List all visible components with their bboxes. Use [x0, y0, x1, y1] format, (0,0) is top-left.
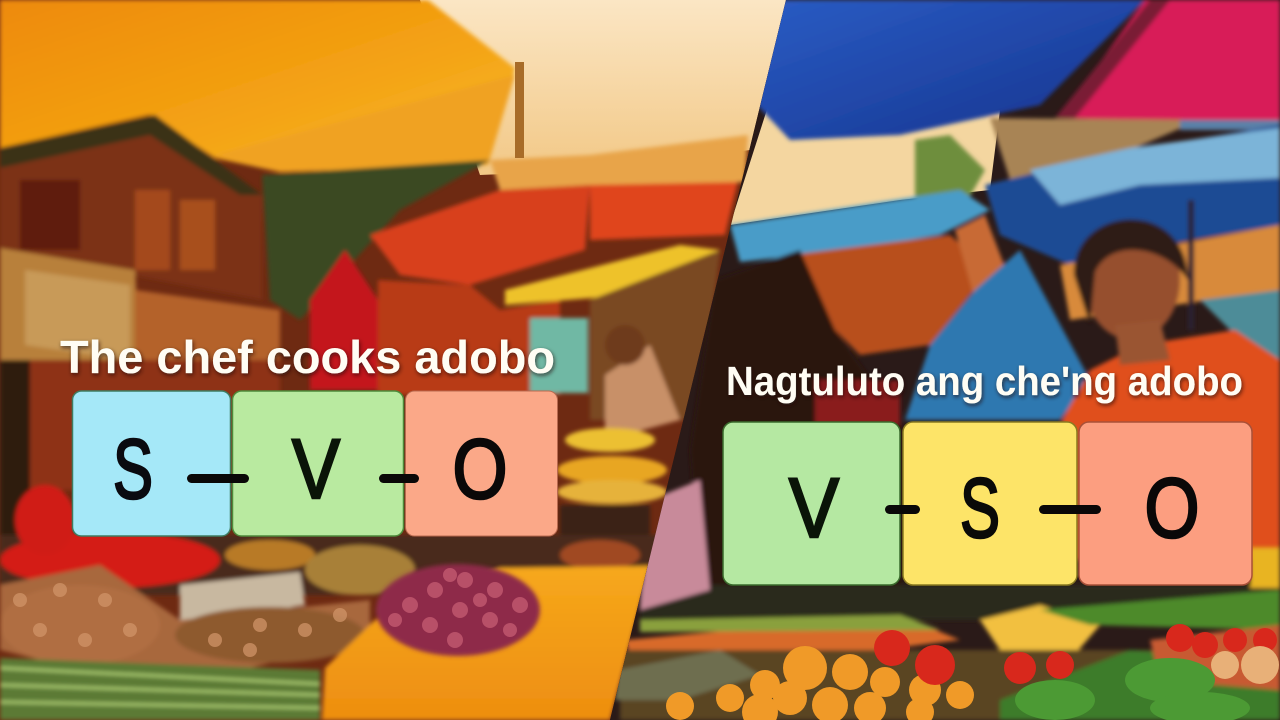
sky: [420, 0, 790, 175]
green onions: [0, 658, 320, 720]
block: object: O: [1144, 461, 1200, 555]
panel: English sentence and SVO blocks: [60, 331, 558, 536]
panel: right market scene (Filipino): [600, 0, 1280, 720]
panel: left market scene (English): [0, 0, 790, 720]
food trays: [565, 428, 655, 452]
orange awning: [0, 0, 515, 172]
block: verb: [232, 391, 404, 536]
vendor: [1062, 219, 1280, 560]
block: subject: S: [960, 461, 1000, 555]
block: verb: V: [789, 461, 839, 555]
vegetables: [626, 626, 961, 654]
orange tarp: [790, 235, 990, 355]
red peppers: [874, 624, 1277, 685]
block: object: O: [452, 422, 508, 516]
oranges: [666, 646, 974, 720]
panel: Filipino sentence and VSO blocks: [723, 358, 1252, 585]
connector: verb to object: [379, 474, 419, 483]
brown produce mound: [0, 565, 370, 680]
purple produce pile: [376, 564, 540, 656]
orange table: [322, 566, 650, 720]
blue umbrella: [985, 125, 1280, 265]
brown produce texture: [13, 583, 347, 657]
colored tent: [262, 135, 748, 395]
wooden stall: [0, 115, 280, 570]
background tree and cloth: [915, 135, 985, 210]
back right: [1060, 225, 1280, 320]
pale produce: [1211, 646, 1279, 684]
heading: English sentence: The chef cooks adobo: [60, 331, 555, 383]
block: subject: [72, 391, 230, 536]
connector: subject to object: [1039, 505, 1101, 514]
leafy greens: [1015, 658, 1250, 720]
red produce: [0, 532, 220, 588]
dark lower band: [640, 585, 1280, 620]
connector: verb to subject: [885, 505, 920, 514]
pole: [515, 62, 524, 158]
blue awning: [757, 0, 1145, 140]
spice piles: [225, 540, 315, 570]
block: object: [1079, 422, 1252, 585]
sky: [730, 100, 1000, 225]
pink awning: [1060, 0, 1280, 125]
block: verb: [723, 422, 900, 585]
lower band: [0, 535, 660, 595]
block: subject: S: [113, 422, 153, 516]
block: object: [406, 391, 558, 536]
heading: Filipino sentence: Nagtuluto ang che'ng adobo: [726, 358, 1243, 404]
dark shopper: [690, 250, 900, 600]
yellow canopy and right stall: [505, 245, 720, 305]
block: subject: [903, 422, 1077, 585]
light blue tarp: [905, 250, 1090, 420]
connector: subject to verb: [187, 474, 249, 483]
block: verb: V: [292, 422, 340, 516]
